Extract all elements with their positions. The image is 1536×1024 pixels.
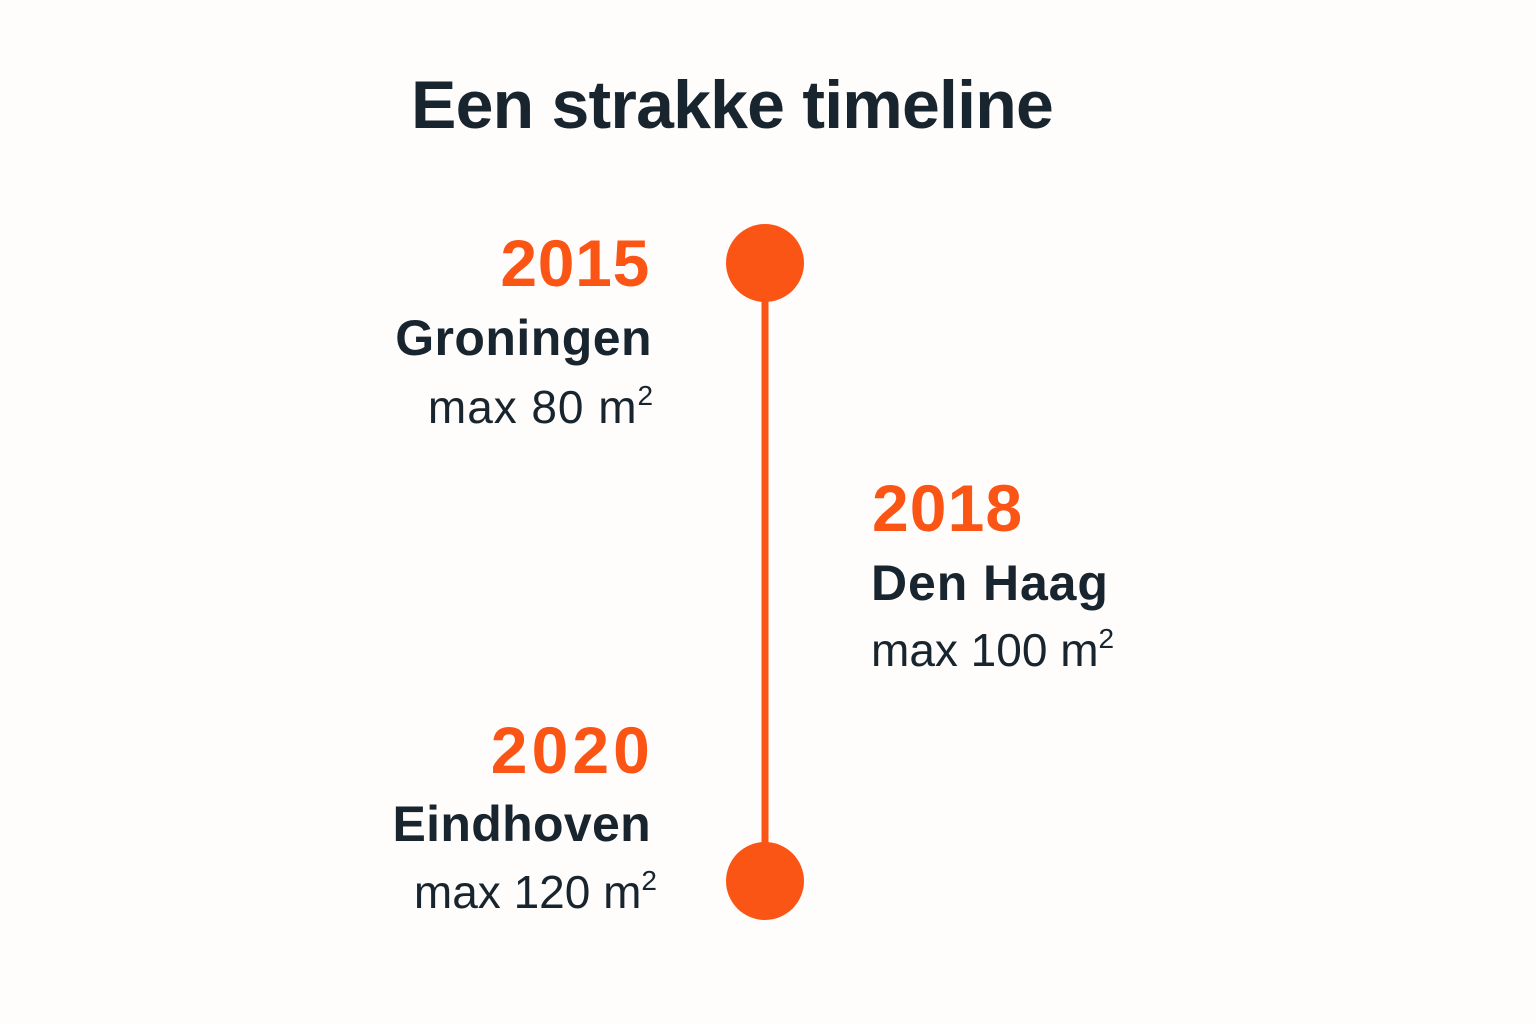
- city Eindhoven: Eindhoven: [392, 796, 651, 852]
- entry: 2015 Groningen: [395, 226, 654, 433]
- entry: 2020 Eindhoven: [392, 713, 657, 918]
- size max 120 m2: max 120 m2: [414, 865, 657, 918]
- title: Een strakke timeline: [411, 67, 1053, 143]
- city Groningen: Groningen: [395, 310, 652, 366]
- year 2018: 2018: [872, 471, 1023, 545]
- city Den Haag: Den Haag: [871, 555, 1109, 611]
- entry: 2018 Den Haag: [871, 471, 1114, 676]
- size max 100 m2: max 100 m2: [871, 623, 1114, 676]
- size max 80 m2: max 80 m2: [428, 380, 654, 433]
- year 2015: 2015: [500, 226, 650, 300]
- year 2020: 2020: [491, 713, 654, 787]
